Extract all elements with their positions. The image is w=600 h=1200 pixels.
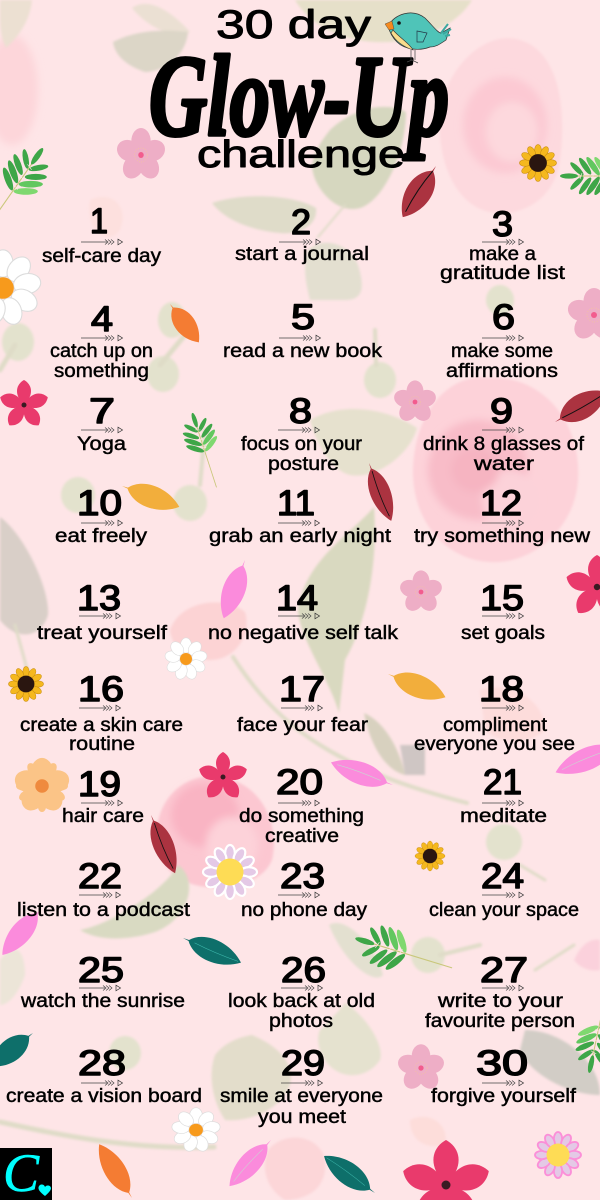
day 26: photos — [269, 1011, 333, 1032]
icon: pink flower — [398, 570, 444, 614]
day 16 — [20, 670, 183, 755]
panel: challenge days — [6, 202, 590, 1128]
day 25 — [20, 951, 185, 1012]
day 16: 16 — [78, 670, 124, 709]
day 1: self-care day — [42, 246, 162, 267]
title: 30 day: 30 day — [216, 3, 371, 47]
day 17 — [237, 670, 369, 736]
icon: red flower — [197, 752, 249, 801]
icon: pink flower — [392, 380, 438, 424]
icon: pink leaf — [213, 556, 256, 622]
day 24 — [429, 857, 579, 921]
day 16: create a skin care — [20, 715, 183, 736]
day 24: clean your space — [429, 900, 579, 921]
icon: fern — [569, 979, 600, 1077]
day 8: posture — [268, 454, 339, 475]
day 1 — [42, 202, 162, 267]
day 8: 8 — [289, 392, 312, 431]
day 6 — [446, 298, 558, 382]
icon: yellow leaf — [384, 664, 450, 708]
day 7: Yoga — [77, 434, 126, 455]
day 18: everyone you see — [414, 734, 575, 755]
icon: sunflower — [520, 144, 556, 182]
day 12 — [414, 484, 590, 547]
day 11: 11 — [277, 484, 315, 523]
icon: fern — [176, 408, 233, 493]
icon: fern — [349, 917, 459, 989]
day 14 — [208, 579, 399, 644]
day 20: creative — [265, 826, 339, 847]
day 19: 19 — [78, 765, 121, 804]
icon: bluebird — [385, 13, 451, 63]
icon: red flower — [564, 555, 600, 618]
day 8 — [241, 392, 363, 475]
background: buds and stems — [0, 205, 600, 1147]
icon: white daisy — [0, 250, 42, 327]
day 10 — [55, 484, 148, 547]
day 7: 7 — [89, 392, 115, 431]
icon: orange leaf — [162, 298, 207, 348]
icon: red leaf — [142, 811, 185, 877]
day 27: favourite person — [425, 1011, 575, 1032]
icon: orange flower — [12, 758, 72, 815]
day 30 — [431, 1044, 577, 1107]
day 12: 12 — [480, 484, 522, 523]
day 24: 24 — [481, 857, 524, 896]
day 30: forgive yourself — [431, 1086, 577, 1107]
icon: pink flower — [565, 288, 600, 343]
day 21: 21 — [483, 763, 522, 802]
day 3: 3 — [492, 205, 513, 244]
icon: red leaf — [359, 459, 401, 525]
day 18: 18 — [479, 670, 524, 709]
day 14: no negative self talk — [208, 623, 399, 644]
day 4: 4 — [91, 300, 113, 339]
icon: pink leaf — [222, 1133, 279, 1193]
day 26: 26 — [281, 951, 326, 990]
icon: fern — [0, 135, 61, 244]
day 21 — [460, 763, 547, 827]
day 23: no phone day — [241, 900, 368, 921]
title: Glow-Up: Glow-Up — [149, 33, 449, 161]
day 2 — [235, 203, 369, 265]
icon: pink flower — [396, 1044, 446, 1093]
day 30: 30 — [476, 1044, 528, 1083]
day 4: catch up on — [50, 341, 153, 362]
day 29: smile at everyone — [220, 1086, 383, 1107]
day 9: drink 8 glasses of — [423, 434, 585, 455]
day 15 — [461, 579, 545, 644]
day 25: watch the sunrise — [20, 991, 185, 1012]
day 4 — [50, 300, 153, 382]
day 12: try something new — [414, 526, 590, 547]
day 11: grab an early night — [209, 526, 392, 547]
day 13: 13 — [77, 579, 121, 618]
day 16: routine — [69, 734, 135, 755]
day 1: 1 — [90, 202, 108, 241]
day 5: read a new book — [223, 341, 383, 362]
day 15: 15 — [480, 579, 524, 618]
day 23 — [241, 857, 368, 921]
day 22: listen to a podcast — [17, 900, 191, 921]
day 14: 14 — [276, 579, 318, 618]
day 20 — [239, 763, 364, 847]
icon: teal leaf — [317, 1147, 382, 1200]
day 22 — [17, 857, 191, 921]
day 28: 28 — [78, 1044, 126, 1083]
icon: yellow leaf — [118, 475, 183, 517]
day 9: water — [473, 454, 535, 475]
day 26: look back at old — [228, 991, 375, 1012]
day 3 — [440, 205, 566, 284]
icon: large red flower — [399, 1140, 493, 1200]
day 28: create a vision board — [6, 1086, 202, 1107]
day 13: treat yourself — [37, 623, 168, 644]
icon: orange leaf — [90, 1139, 141, 1200]
day 3: gratitude list — [440, 263, 566, 284]
day 13 — [37, 579, 168, 644]
day 27: 27 — [480, 951, 528, 990]
day 18 — [414, 670, 575, 755]
day 25: 25 — [78, 951, 124, 990]
day 9: 9 — [490, 392, 513, 431]
icon: pink leaf — [551, 735, 600, 783]
day 20: 20 — [276, 763, 323, 802]
day 5 — [223, 298, 383, 362]
icon: sunflower — [415, 841, 445, 871]
day 29 — [220, 1044, 383, 1128]
day 19 — [62, 765, 144, 827]
icon: lilac flower — [535, 1132, 581, 1178]
icon: pink flower — [114, 128, 168, 183]
day 18: compliment — [443, 715, 548, 736]
day 21: meditate — [460, 806, 547, 827]
day 26 — [228, 951, 375, 1032]
icon: red leaf — [549, 381, 600, 433]
logo badge — [0, 1143, 52, 1200]
day 2: 2 — [291, 203, 311, 242]
day 3: make a — [469, 244, 536, 265]
day 17: 17 — [279, 670, 325, 709]
day 10: 10 — [77, 484, 122, 523]
day 27 — [425, 951, 575, 1032]
day 6: 6 — [492, 298, 515, 337]
icon: lilac daisy — [203, 845, 257, 899]
icon: white daisy — [164, 638, 208, 681]
day 27: write to your — [437, 991, 564, 1012]
title: challenge: challenge — [197, 134, 405, 176]
day 4: something — [54, 361, 149, 382]
day 29: 29 — [281, 1044, 325, 1083]
day 9 — [423, 392, 585, 475]
day 8: focus on your — [241, 434, 363, 455]
day 15: set goals — [461, 623, 545, 644]
day 5: 5 — [291, 298, 315, 337]
day 23: 23 — [280, 857, 325, 896]
day 19: hair care — [62, 806, 144, 827]
day 2: start a journal — [235, 244, 369, 265]
icon: pink leaf — [327, 752, 397, 796]
icon: pink leaf — [0, 902, 49, 962]
icon: teal leaf — [179, 928, 245, 973]
day 7 — [77, 392, 126, 455]
icon: red flower — [0, 380, 50, 429]
icon: sunflower — [8, 666, 43, 702]
day 10: eat freely — [55, 526, 148, 547]
day 17: face your fear — [237, 715, 369, 736]
icon: teal leaf — [0, 1024, 40, 1075]
title — [149, 3, 449, 176]
day 6: make some — [451, 341, 553, 362]
icon: red leaf — [392, 159, 447, 224]
day 22: 22 — [78, 857, 122, 896]
day 6: affirmations — [446, 361, 558, 382]
day 29: you meet — [258, 1107, 347, 1128]
day 28 — [6, 1044, 202, 1107]
day 20: do something — [239, 806, 364, 827]
icon: white daisy — [171, 1108, 221, 1153]
day 11 — [209, 484, 392, 547]
icon: fern right — [560, 155, 600, 197]
